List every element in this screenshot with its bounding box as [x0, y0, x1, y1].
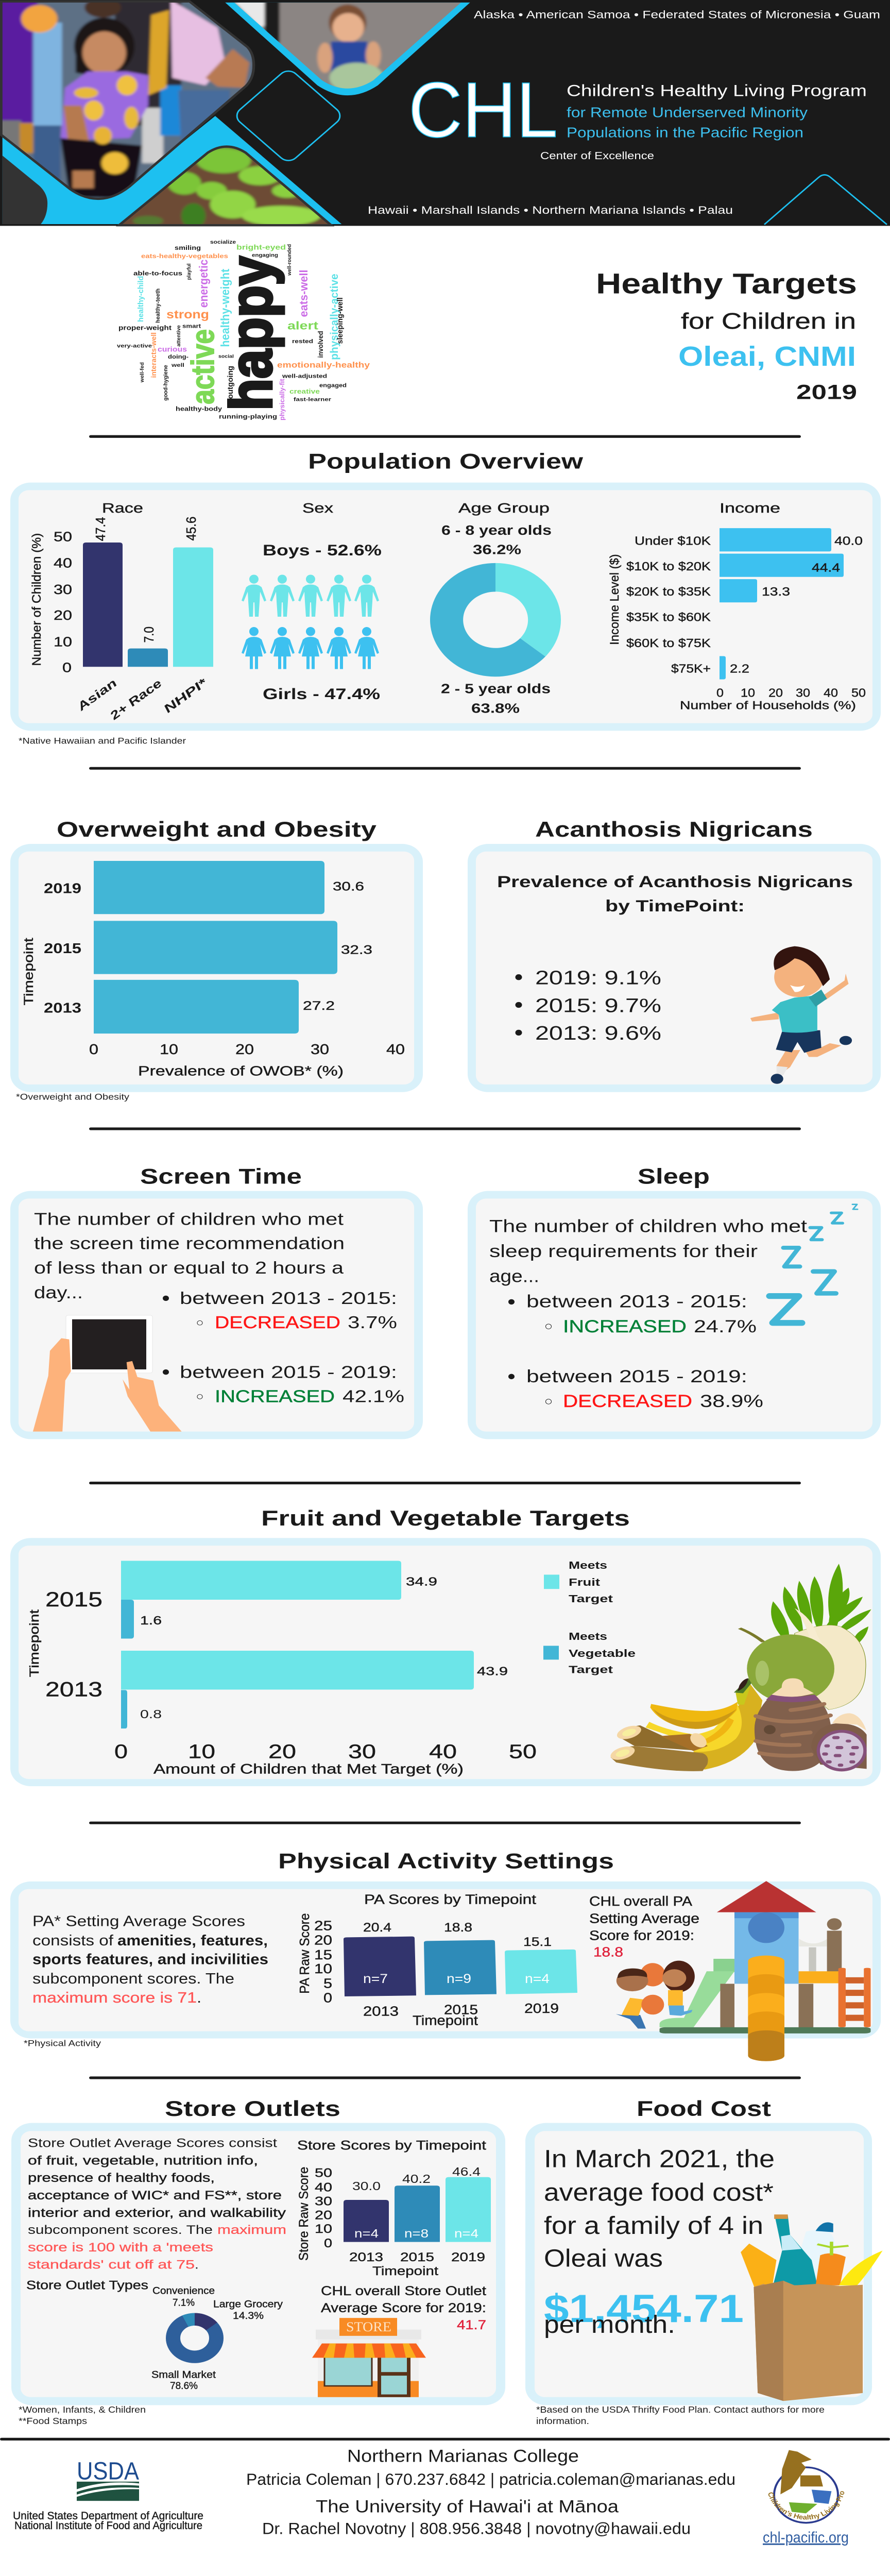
income bar chart: Income Level ($): [608, 554, 621, 645]
change list: INCREASED: [563, 1316, 687, 1336]
age group donut chart: [430, 523, 561, 716]
prevalence list: 2013: 9.6%: [535, 1022, 661, 1044]
word cloud: emotionally-healthy: [277, 361, 370, 369]
bar chart: PA scores: n=7: [363, 1971, 388, 1986]
donut chart: store outlet types: [26, 2278, 283, 2392]
description text: Store Outlet Average Scores consist: [28, 2136, 278, 2150]
description text: of fruit, vegetable, nutrition info,: [28, 2153, 258, 2167]
word cloud: well: [171, 362, 184, 368]
overall store score callout: CHL overall Store Outlet: [321, 2283, 487, 2298]
bar chart: OWOB: 10: [160, 1042, 178, 1057]
panel: store outlets: [11, 2123, 505, 2405]
description text: [32, 1913, 268, 2006]
age group donut chart: 6 - 8 year olds: [441, 523, 552, 538]
footnote: *Native Hawaiian and Pacific Islander: [19, 736, 186, 745]
bar chart: OWOB: [22, 861, 405, 1078]
overall PA score callout: CHL overall PA: [589, 1894, 692, 1908]
word cloud: socialize: [210, 240, 236, 245]
bar chart: store scores: 40.2: [402, 2173, 431, 2186]
income bar chart: 10: [741, 686, 755, 700]
income bar chart: $75K+: [671, 662, 711, 675]
income bar chart: 50: [851, 686, 866, 700]
bar chart: PA scores: 25: [314, 1918, 332, 1933]
word cloud: able-to-focus: [133, 270, 182, 277]
word cloud: physically-fit: [278, 379, 286, 420]
food cost text: $1,454.71: [544, 2286, 744, 2331]
legend: Meets: [569, 1560, 607, 1571]
change list: [163, 1289, 404, 1406]
footer: contacts: [246, 2446, 735, 2538]
bar chart: targets: 40: [429, 1740, 457, 1762]
intro text: sleep requirements for their: [489, 1241, 758, 1261]
income bar chart: $35K to $60K: [626, 611, 711, 624]
change list: 42.1%: [343, 1387, 404, 1406]
heading: physical activity settings: Physical Activity Settings: [278, 1849, 614, 1873]
intro text: day...: [34, 1283, 83, 1302]
kids with basketballs: [616, 1961, 695, 2029]
bar chart: OWOB: 32.3: [341, 942, 372, 957]
race bar chart: 0: [62, 660, 72, 675]
footer: CHL logo: chl-pacific.org: [763, 2529, 849, 2546]
sex chart: [242, 541, 382, 702]
race bar chart: 7.0: [142, 626, 157, 642]
change list: INCREASED: [215, 1387, 335, 1406]
race bar chart: 10: [54, 634, 72, 649]
footnote: food cost: *Based on the USDA Thrifty Food Plan. Contact authors for more: [536, 2404, 825, 2415]
description text: consists of: [32, 1932, 113, 1949]
word cloud: smart: [182, 323, 201, 329]
bar chart: targets: Amount of Children that Met Target (%): [153, 1762, 464, 1777]
donut chart: store outlet types: Large Grocery: [213, 2299, 283, 2310]
word cloud: proper-weight: [118, 325, 172, 331]
bar chart: OWOB: 2013: [44, 1000, 81, 1016]
race bar chart: Number of Children (%): [30, 533, 43, 666]
footer: USDA logo: National Institute of Food and Agriculture: [14, 2519, 202, 2531]
bar chart: store scores: Timepoint: [372, 2264, 439, 2278]
bar chart: PA scores: n=4: [525, 1971, 550, 1986]
food cost text: [544, 2145, 775, 2338]
change list: 24.7%: [694, 1316, 757, 1336]
word cloud: curious: [158, 345, 187, 353]
heading: population overview: Population Overview: [308, 449, 584, 473]
intro text: [34, 1210, 345, 1302]
description text: interior and exterior, and walkability: [28, 2206, 286, 2220]
bar chart: PA scores: 15: [314, 1947, 332, 1962]
word cloud: doing-: [168, 353, 189, 360]
diamond outline: [233, 67, 344, 164]
word cloud: good-hygiene: [162, 365, 169, 401]
description text: PA* Setting Average Scores: [32, 1913, 245, 1929]
intro text: of less than or equal to 2 hours a: [34, 1259, 344, 1278]
description text: maximum score is 71: [32, 1989, 197, 2006]
sex chart: Boys - 52.6%: [263, 541, 382, 559]
change list: between 2015 - 2019:: [180, 1363, 397, 1382]
income bar chart: Number of Households (%): [680, 699, 856, 712]
bar chart: store scores: 0: [324, 2236, 332, 2250]
footnote: food cost: information.: [536, 2416, 589, 2426]
bar chart: PA scores: 2015: [444, 2003, 478, 2017]
word cloud: healthy-body: [176, 405, 222, 413]
description text: acceptance of WIC* and FS**, store: [28, 2188, 282, 2202]
race bar chart: 20: [54, 608, 72, 623]
word cloud: interacts-well: [149, 332, 158, 378]
income bar chart: $20K to $35K: [626, 585, 711, 599]
income bar chart: 40: [824, 686, 838, 700]
bar chart: targets: 50: [509, 1740, 537, 1762]
intro text: the screen time recommendation: [34, 1234, 345, 1253]
race bar chart: 2+ Race: [107, 677, 165, 722]
bar chart: targets: 20: [268, 1740, 296, 1762]
heading: overweight and obesity: Overweight and Obesity: [57, 817, 376, 841]
race bar chart: 50: [54, 529, 72, 544]
donut chart: store outlet types: 14.3%: [233, 2310, 264, 2321]
word cloud: eats-healthy-vegetables: [141, 252, 228, 260]
race bar chart: NHPI*: [161, 675, 211, 715]
bar chart: OWOB: 27.2: [303, 998, 335, 1013]
bar chart: OWOB: Prevalence of OWOB* (%): [138, 1063, 344, 1078]
bar chart: PA scores: 18.8: [444, 1920, 472, 1935]
change list: DECREASED: [215, 1313, 340, 1332]
footer: contacts: Patricia Coleman | 670.237.6842 | patricia.coleman@marianas.edu: [246, 2470, 735, 2488]
program subtitle line 1: for Remote Underserved Minority: [567, 105, 808, 121]
donut chart: store outlet types: 7.1%: [173, 2297, 195, 2308]
description text: standards' cut off at 75: [28, 2257, 195, 2272]
bar chart: store scores: 50: [315, 2165, 332, 2180]
member regions top: Alaska • American Samoa • Federated States of Micronesia • Guam: [474, 9, 880, 21]
bar chart: store scores: 20: [315, 2208, 332, 2222]
heading: food cost: Food Cost: [637, 2096, 771, 2121]
footer: USDA logo: [13, 2458, 203, 2531]
bar chart: targets: Timepoint: [27, 1609, 41, 1677]
bar chart: targets: 2015: [45, 1588, 102, 1611]
bar chart: OWOB: 20: [235, 1042, 254, 1057]
donut chart: store outlet types: Small Market: [151, 2369, 216, 2380]
food cost text: for a family of 4 in: [544, 2212, 763, 2240]
bar chart: OWOB: 30: [311, 1042, 329, 1057]
panel: screen time: [10, 1191, 423, 1439]
food cost text: In March 2021, the: [544, 2145, 775, 2173]
income bar chart: 0: [716, 686, 724, 700]
donut chart: store outlet types: 78.6%: [170, 2380, 198, 2392]
word cloud: fast-learner: [294, 397, 332, 402]
bar chart: PA scores: 10: [314, 1961, 332, 1976]
icon: store front: [312, 2318, 426, 2397]
bar chart: PA scores: PA Scores by Timepoint: [364, 1892, 536, 1907]
footer: contacts: Northern Marianas College: [347, 2446, 579, 2466]
bar chart: PA scores: 0: [323, 1990, 332, 2005]
word cloud: well-rounded: [286, 244, 293, 276]
intro text: [489, 1216, 808, 1286]
age group donut chart: 63.8%: [471, 701, 520, 716]
panel: acanthosis nigricans: [468, 844, 881, 1092]
bar chart: store scores: Store Raw Score: [297, 2167, 311, 2261]
word cloud: smiling: [175, 244, 201, 251]
panel: population overview: [10, 483, 881, 731]
icons: boys: [242, 574, 379, 617]
bar chart: targets: 34.9: [406, 1575, 437, 1588]
year: 2019: [796, 381, 857, 404]
title: Healthy Targets: [596, 267, 857, 299]
bar chart: PA scores: [298, 1892, 577, 2028]
overall PA score callout: Score for 2019:: [589, 1928, 694, 1943]
center of excellence: Center of Excellence: [540, 150, 654, 162]
panel: physical activity settings: [10, 1882, 881, 2039]
word cloud: playful: [186, 263, 192, 280]
program name: Children's Healthy Living Program: [567, 82, 867, 100]
bar chart: targets: 1.6: [140, 1614, 162, 1627]
word cloud: eats-well: [298, 269, 310, 317]
word cloud: happy: [218, 256, 284, 411]
intro text: age...: [489, 1266, 539, 1286]
income bar chart: 40.0: [834, 534, 863, 548]
income bar chart: 13.3: [762, 585, 790, 599]
race heading: Race: [102, 501, 143, 515]
bar chart: OWOB: 30.6: [333, 879, 364, 893]
intro text: The number of children who met: [489, 1216, 808, 1236]
word cloud: social: [218, 354, 234, 359]
bar chart: PA scores: 2013: [363, 2004, 399, 2019]
word cloud: healthy-child: [136, 276, 145, 322]
age group heading: Age Group: [458, 501, 550, 515]
bar chart: targets: 0: [114, 1740, 128, 1762]
bar chart: targets: 43.9: [477, 1665, 508, 1678]
income heading: Income: [720, 501, 780, 515]
footnote: store: **Food Stamps: [19, 2416, 87, 2426]
bar chart: targets: [27, 1561, 537, 1777]
word cloud: physically-active: [329, 274, 340, 360]
bar chart: store scores: 40: [315, 2180, 332, 2194]
footnote: store: [19, 2404, 146, 2426]
heading: screen time: Screen Time: [140, 1164, 302, 1189]
footnote: food cost: [536, 2404, 825, 2426]
word cloud: involved: [317, 331, 324, 358]
heading: acanthosis nigricans: Acanthosis Nigricans: [535, 817, 813, 841]
intro text: The number of children who met: [34, 1210, 344, 1229]
panel: sleep: [468, 1191, 881, 1439]
title line 2: for Children in: [681, 309, 856, 333]
bar chart: PA scores: n=9: [447, 1971, 471, 1986]
overall store score callout: Average Score for 2019:: [321, 2300, 486, 2315]
bar chart: PA scores: PA Raw Score: [298, 1913, 312, 1994]
icon: hands on tablet: [33, 1315, 182, 1432]
footnote: *Overweight and Obesity: [16, 1092, 129, 1101]
bar chart: targets: 10: [188, 1740, 215, 1762]
race bar chart: 30: [54, 582, 72, 597]
word cloud: outgoing: [226, 366, 234, 399]
word cloud: well-adjusted: [282, 372, 327, 379]
description text: .: [195, 2257, 199, 2272]
income bar chart: [608, 528, 866, 712]
description text: sports features, and incivilities: [32, 1951, 268, 1968]
panel: fruit and vegetable targets: [10, 1538, 881, 1786]
bar chart: PA scores: 15.1: [523, 1935, 552, 1948]
legend: Target: [569, 1664, 613, 1675]
legend: Target: [569, 1594, 613, 1605]
bar chart: PA scores: 20: [314, 1933, 332, 1947]
footer: CHL logo: Children's Healthy Living Program: [768, 2491, 845, 2519]
food cost text: per month.: [544, 2311, 675, 2338]
bar chart: store scores: n=8: [404, 2227, 429, 2240]
change list: 3.7%: [348, 1313, 397, 1332]
icon: store front: STORE: [346, 2320, 391, 2335]
word cloud: very-active: [117, 343, 152, 349]
word cloud: sleeping-well: [336, 297, 344, 344]
bar chart: store scores: Store Scores by Timepoint: [297, 2138, 487, 2153]
race bar chart: Asian: [73, 676, 120, 714]
subheading line 2: by TimePoint:: [605, 897, 745, 916]
change list: [508, 1291, 763, 1411]
description text: score is 100 with a 'meets: [28, 2240, 213, 2254]
bar chart: store scores: 30: [315, 2194, 332, 2208]
change list: between 2013 - 2015:: [180, 1289, 397, 1308]
icon: playground and kids: [616, 1881, 870, 2061]
icon: bananas, cassava and taro: [608, 1678, 867, 1771]
overall store score callout: [321, 2283, 487, 2332]
legend: Meets: [569, 1631, 607, 1642]
heading: sleep: Sleep: [638, 1164, 710, 1189]
prevalence list: [515, 967, 661, 1044]
overall PA score callout: Setting Average: [589, 1911, 699, 1926]
footnote: *Physical Activity: [24, 2039, 101, 2048]
bar chart: store scores: 46.4: [452, 2165, 481, 2179]
prevalence list: 2019: 9.1%: [535, 967, 661, 989]
race bar chart: 45.6: [184, 517, 199, 540]
bar chart: PA scores: 20.4: [363, 1920, 391, 1935]
word cloud: healthy-weight: [219, 269, 232, 347]
bar chart: targets: 30: [348, 1740, 376, 1762]
overall PA score callout: [589, 1894, 699, 1959]
member regions bottom: Hawaii • Marshall Islands • Northern Mariana Islands • Palau: [368, 204, 733, 216]
race bar chart: [30, 517, 213, 722]
legend: Fruit: [569, 1577, 600, 1588]
bar chart: store scores: 30.0: [352, 2179, 381, 2193]
header banner: [0, 0, 890, 228]
sex chart: Girls - 47.4%: [263, 685, 380, 702]
bar chart: PA scores: Timepoint: [413, 2013, 478, 2028]
income bar chart: 20: [768, 686, 783, 700]
location: Oleai, CNMI: [678, 341, 856, 372]
bar chart: OWOB: 2015: [44, 941, 81, 956]
bar chart: PA scores: 5: [323, 1976, 332, 1991]
heading: store outlets: Store Outlets: [165, 2096, 340, 2121]
header photo collage: [0, 0, 472, 228]
word cloud: strong: [166, 308, 209, 321]
income bar chart: 2.2: [730, 662, 749, 675]
overall store score callout: 41.7: [457, 2317, 486, 2332]
bar chart: store scores: [297, 2138, 491, 2278]
income bar chart: $10K to $20K: [626, 560, 711, 573]
description text: .: [197, 1989, 201, 2006]
change list: between 2013 - 2015:: [526, 1291, 747, 1311]
word cloud: well-fed: [139, 362, 145, 383]
description text: [28, 2136, 286, 2272]
footnote: store: *Women, Infants, & Children: [19, 2404, 146, 2415]
description text: subcomponent scores. The: [28, 2223, 213, 2236]
income bar chart: 44.4: [812, 561, 840, 574]
bar chart: OWOB: Timepoint: [22, 938, 36, 1005]
bar chart: OWOB: 2019: [44, 880, 81, 896]
bar chart: store scores: 2013: [349, 2250, 383, 2264]
legend: [543, 1560, 636, 1675]
word cloud: rested: [292, 338, 313, 345]
food cost text: Oleai was: [544, 2245, 663, 2272]
subheading: Prevalence of Acanthosis Nigricans: [497, 873, 853, 891]
bar chart: targets: 0.8: [140, 1708, 162, 1721]
description text: presence of healthy foods,: [28, 2171, 215, 2185]
age group donut chart: 36.2%: [473, 542, 521, 557]
icon: sleeping Z letters: [769, 1205, 858, 1323]
bar chart: store scores: 10: [315, 2222, 332, 2236]
word cloud: healthy-teeth: [155, 289, 161, 323]
bar chart: store scores: n=4: [454, 2227, 478, 2240]
income bar chart: Under $10K: [635, 534, 711, 548]
report title block: [596, 267, 857, 404]
triangle outline: [764, 175, 887, 225]
panel: food cost: [525, 2123, 883, 2405]
CHL logotype: CHL: [408, 66, 558, 154]
bar chart: store scores: n=4: [354, 2227, 379, 2240]
donut chart: store outlet types: Store Outlet Types: [26, 2278, 148, 2292]
word cloud: active: [185, 329, 221, 404]
bar chart: OWOB: 40: [386, 1042, 405, 1057]
icon: breadfruit and leaves: [740, 1564, 871, 1710]
prevalence list: 2015: 9.7%: [535, 994, 661, 1016]
change list: between 2015 - 2019:: [526, 1366, 747, 1386]
description text: amenities, features,: [117, 1932, 268, 1949]
bar chart: OWOB: 0: [89, 1042, 98, 1057]
sex heading: Sex: [302, 501, 333, 515]
change list: DECREASED: [563, 1391, 692, 1411]
overall PA score callout: 18.8: [593, 1945, 623, 1959]
income bar chart: $60K to $75K: [626, 637, 711, 650]
age group donut chart: 2 - 5 year olds: [441, 681, 551, 696]
footer: USDA logo: USDA: [77, 2458, 139, 2485]
icon: grocery bag: [741, 2214, 883, 2401]
heading: fruit and vegetable targets: Fruit and Vegetable Targets: [261, 1506, 630, 1530]
description text: subcomponent scores. The: [32, 1970, 234, 1987]
bar chart: store scores: 2015: [400, 2250, 434, 2264]
word cloud: running-playing: [219, 413, 277, 420]
word cloud: engaging: [252, 252, 278, 258]
bar chart: store scores: 2019: [451, 2250, 485, 2264]
bar chart: targets: 2013: [45, 1678, 102, 1701]
footer: contacts: The University of Hawai'i at Mānoa: [316, 2496, 619, 2516]
word cloud: alert: [287, 319, 318, 332]
food cost text: average food cost*: [544, 2179, 774, 2207]
word cloud: [117, 240, 370, 420]
race bar chart: 47.4: [94, 517, 108, 541]
panel: overweight and obesity: [10, 844, 423, 1092]
word cloud: creative: [289, 387, 320, 395]
income bar chart: 30: [796, 686, 810, 700]
bar chart: PA scores: 2019: [524, 2001, 559, 2016]
footer: USDA logo: United States Department of Agriculture: [13, 2509, 203, 2521]
legend: Vegetable: [569, 1648, 636, 1659]
race bar chart: 40: [54, 555, 72, 570]
word cloud: attentive: [176, 325, 181, 347]
donut chart: store outlet types: Convenience: [152, 2285, 215, 2296]
footer: contacts: Dr. Rachel Novotny | 808.956.3848 | novotny@hawaii.edu: [262, 2520, 691, 2538]
change list: 38.9%: [700, 1391, 763, 1411]
word cloud: energetic: [197, 259, 210, 308]
icon: running boy: [750, 946, 852, 1084]
word cloud: engaged: [319, 382, 347, 389]
icons: girls: [242, 627, 379, 669]
description text: maximum: [217, 2223, 286, 2236]
program subtitle line 2: Populations in the Pacific Region: [567, 125, 803, 141]
word cloud: bright-eyed: [236, 243, 286, 251]
